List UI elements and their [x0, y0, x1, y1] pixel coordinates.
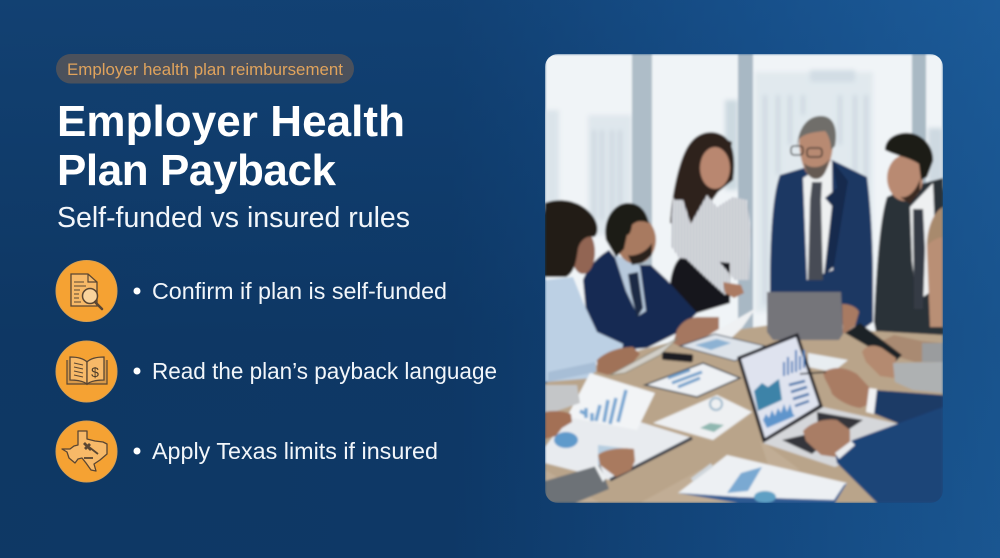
bullet	[134, 448, 140, 454]
seated man in navy	[583, 203, 719, 350]
icon: open book with dollar sign: $	[91, 364, 99, 380]
icon: document with magnifying glass	[56, 260, 117, 322]
text: Confirm if plan is self-funded	[152, 278, 447, 304]
icon: open book with dollar sign	[56, 341, 117, 402]
rear laptop	[767, 292, 859, 340]
checklist item 1	[56, 260, 447, 322]
title	[57, 97, 405, 195]
standing man in charcoal suit	[874, 133, 943, 338]
title: Employer Health	[57, 97, 405, 146]
checklist item 2	[56, 341, 497, 402]
icon: Texas with gavel	[56, 421, 117, 482]
papers, tablets and phone	[545, 308, 848, 503]
seated woman with curly hair	[545, 200, 640, 382]
checklist item 3	[56, 421, 438, 482]
title: Plan Payback	[57, 146, 337, 195]
right hands and navy sleeves	[800, 368, 943, 503]
tablet and hands at right	[845, 323, 943, 393]
text: Apply Texas limits if insured	[152, 438, 438, 464]
badge: topic pill	[56, 54, 354, 84]
table	[545, 325, 943, 503]
open laptop with charts	[737, 333, 903, 467]
subtitle: Self-funded vs insured rules	[57, 202, 410, 234]
standing man in navy suit	[770, 116, 873, 327]
bullet	[134, 288, 140, 294]
foreground left hands and grey sleeve	[545, 411, 635, 503]
window and skyline	[545, 54, 943, 374]
badge: topic pill: Employer health plan reimbursement	[67, 60, 343, 79]
standing woman	[670, 132, 751, 315]
text: Read the plan’s payback language	[152, 358, 497, 384]
bullet	[134, 368, 140, 374]
photo: business team reviewing charts at a conference table	[545, 54, 943, 503]
